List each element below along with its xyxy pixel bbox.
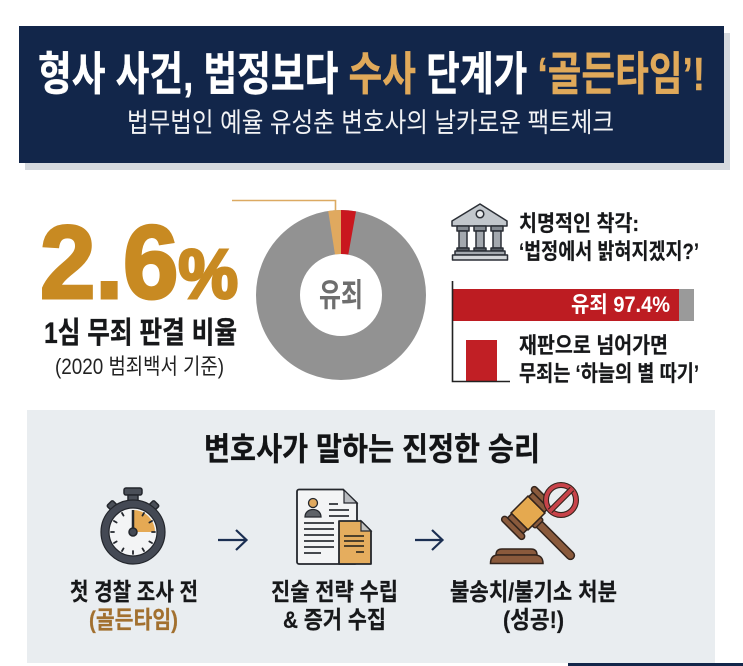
bottom navy strip [568,663,743,666]
head [511,496,545,530]
step 1 label: 첫 경찰 조사 전 [70,579,198,606]
panel heading: 변호사가 말하는 진정한 승리 [204,431,540,467]
step 2 label: & 증거 수집 [283,607,386,634]
bar chart caption: 재판으로 넘어가면 [519,333,668,358]
misconception text: 치명적인 착각: [519,211,639,236]
step 1 label [70,579,198,634]
donut slice: acquittal [328,210,341,254]
donut callout line [232,200,336,211]
title: 형사 사건, 법정보다 수사 단계가 ‘골든타임’! [38,48,705,100]
icon: gavel with prohibition sign [490,485,590,575]
base [496,549,537,555]
step 2 label: 진술 전략 수립 [271,579,398,606]
step 1 label: (골든타임) [89,607,178,634]
donut chart [232,200,404,358]
header banner [19,26,730,170]
bar chart [452,281,694,382]
step 3 label: 불송치/불기소 처분 [450,579,617,606]
arrow 1 [218,530,246,550]
stat source: (2020 범죄백서 기준) [55,354,224,379]
donut center label: 유죄 [319,277,363,313]
step 2 label [271,579,398,634]
icon: stopwatch [101,488,165,564]
bar label: 유죄 97.4% [571,292,670,317]
bar chart caption [519,333,699,386]
big stat: 2.6%: 2.6% [40,205,238,321]
subtitle: 법무법인 예율 유성춘 변호사의 날카로운 팩트체크 [127,108,614,138]
step 3 label [450,579,617,634]
bar chart caption: 무죄는 ‘하늘의 별 따기’ [519,361,699,386]
step 3 label: (성공!) [503,607,564,634]
misconception text: ‘법정에서 밝혀지겠지?’ [519,239,699,264]
bar: remainder [679,289,694,321]
panel: true victory [27,410,715,663]
bar: conviction [453,289,679,321]
icon: courthouse [452,204,508,260]
donut slice: red [341,210,356,255]
bar: small red [466,340,497,381]
arrow 2 [415,530,442,550]
misconception text [519,211,699,264]
prohibition sign [546,485,576,515]
handle [532,517,576,561]
stat label: 1심 무죄 판결 비율 [44,317,237,350]
icon: documents [297,490,371,564]
